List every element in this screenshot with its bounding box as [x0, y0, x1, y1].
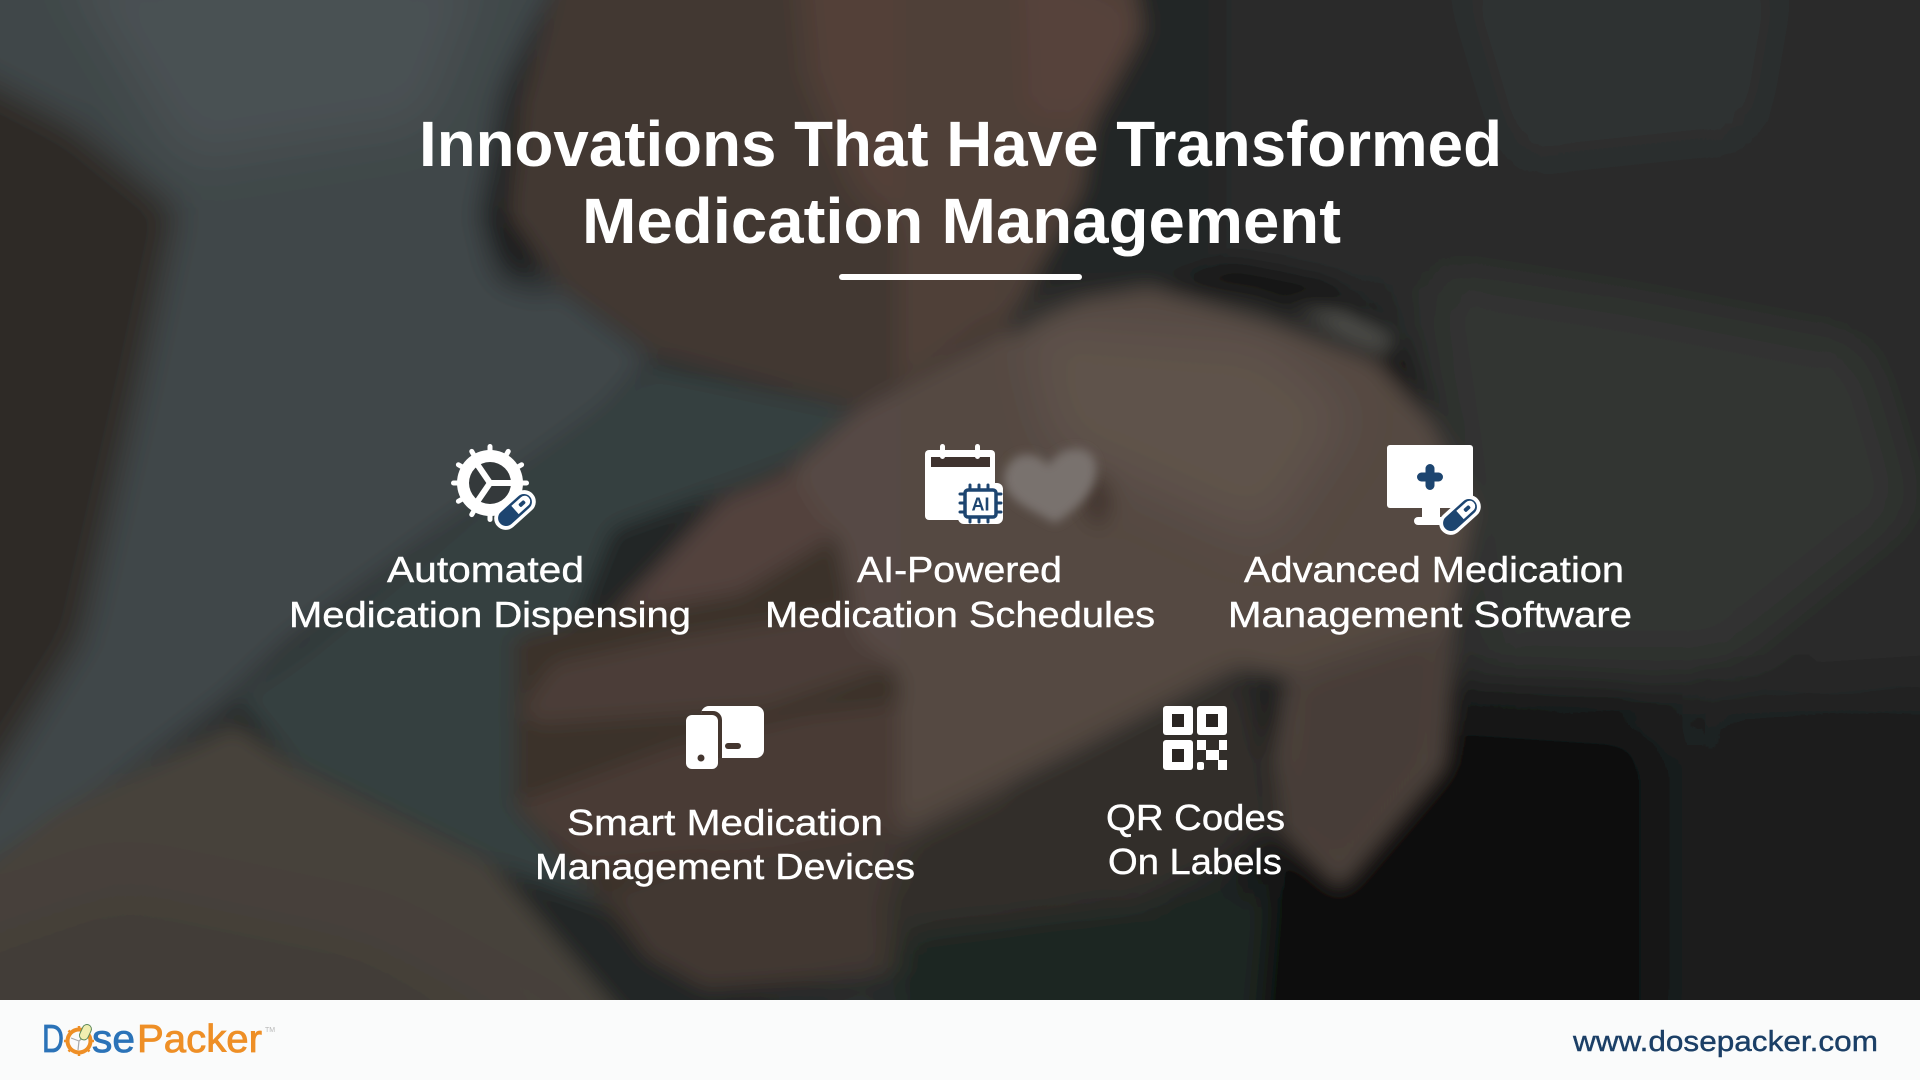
logo: DosePacker: Packer — [137, 1018, 262, 1061]
label: AI-Powered Medication Schedules: Medication Schedules — [765, 594, 1155, 635]
label: AI-Powered Medication Schedules: AI-Powered — [857, 549, 1062, 590]
label: AI-Powered Medication Schedules — [765, 549, 1155, 635]
label: Smart Medication Management Devices — [535, 802, 915, 887]
title: Innovations That Have Transformed — [419, 108, 1502, 180]
title — [419, 108, 1502, 257]
icon: AI calendar — [925, 444, 1003, 524]
logo: DosePacker: D — [42, 1018, 64, 1061]
logo: DosePacker: se — [92, 1018, 135, 1061]
footer bar — [0, 1000, 1920, 1080]
label: QR Codes On Labels: On Labels — [1108, 841, 1282, 882]
label: Advanced Medication Management Software: Advanced Medication — [1244, 549, 1624, 590]
label: Smart Medication Management Devices: Management Devices — [535, 846, 915, 887]
label: Advanced Medication Management Software: Management Software — [1228, 594, 1632, 635]
logo: DosePacker — [42, 1018, 275, 1061]
title underline — [839, 274, 1082, 280]
label: Smart Medication Management Devices: Smart Medication — [567, 802, 883, 843]
label: QR Codes On Labels — [1106, 797, 1285, 882]
title: Medication Management — [582, 185, 1341, 257]
icon: smart devices — [686, 706, 764, 769]
label: Automated Medication Dispensing: Automated — [387, 549, 584, 590]
label: Automated Medication Dispensing: Medication Dispensing — [289, 594, 691, 635]
label: QR Codes On Labels: QR Codes — [1106, 797, 1285, 838]
icon: QR code — [1163, 706, 1227, 770]
icon: AI calendar: AI — [972, 494, 990, 514]
icon: gear with pill — [451, 444, 541, 535]
logo: DosePacker: TM — [265, 1027, 275, 1034]
website URL: www.dosepacker.com — [1572, 1026, 1878, 1058]
icon: monitor with medical cross and pill — [1387, 445, 1486, 540]
label: Automated Medication Dispensing — [289, 549, 691, 635]
label: Advanced Medication Management Software — [1228, 549, 1632, 635]
